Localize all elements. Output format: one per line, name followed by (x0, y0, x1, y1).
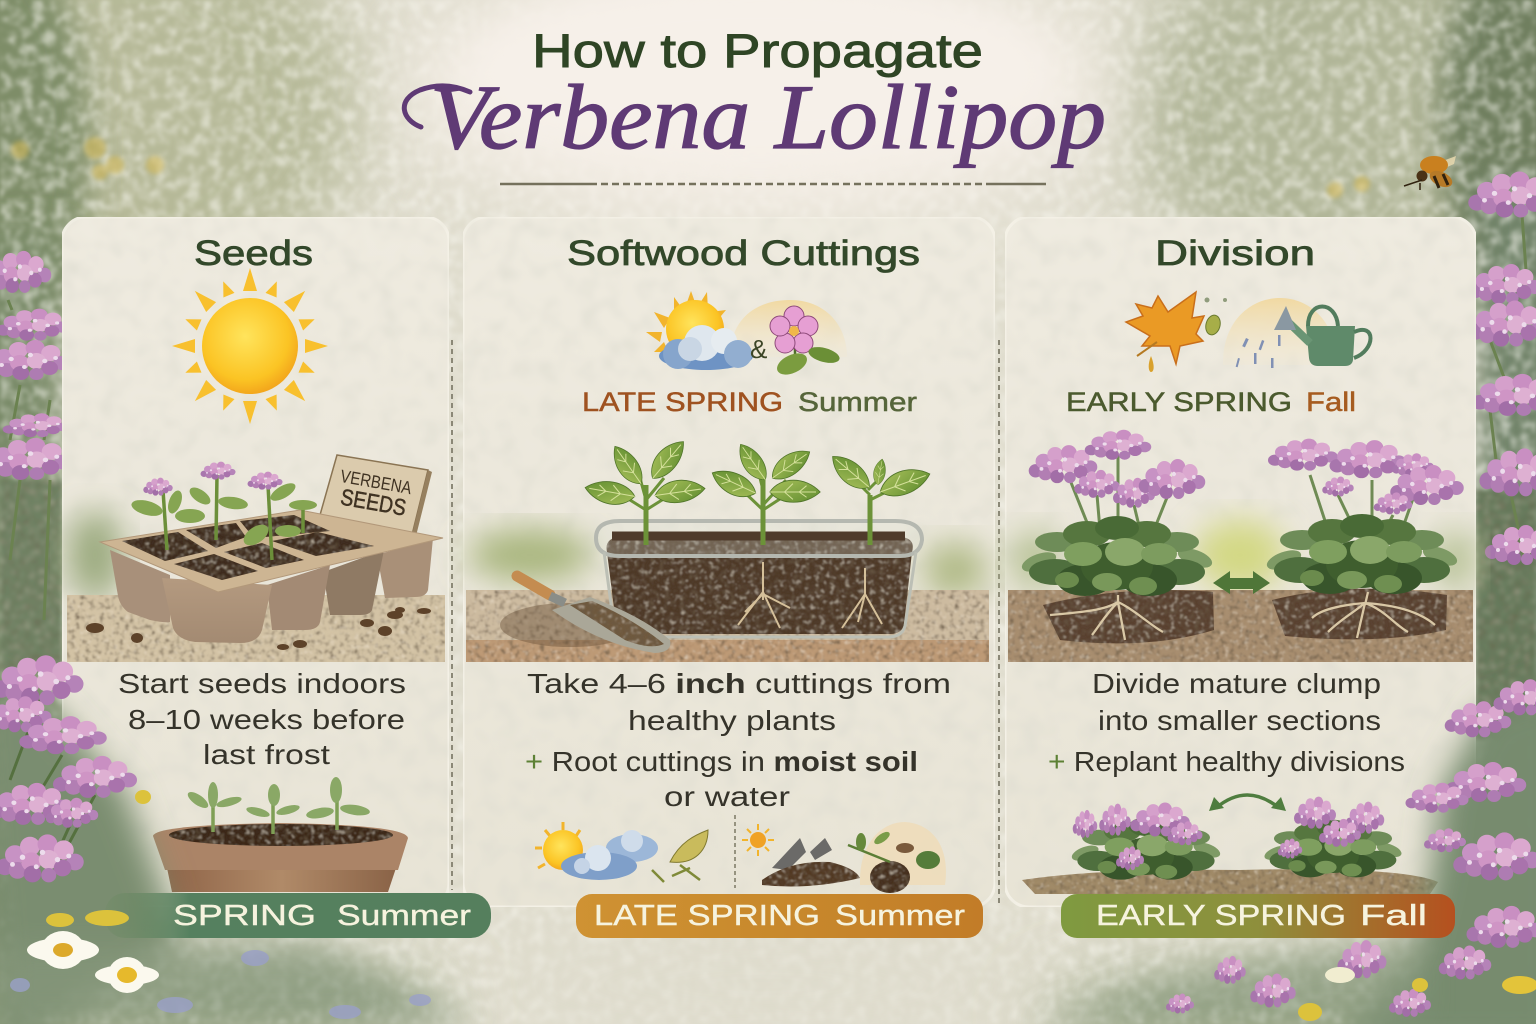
title line two: Verbena Lollipop (430, 66, 1106, 168)
cuttings (583, 434, 933, 545)
season pill: late spring summer (576, 894, 983, 938)
icon: sun (172, 268, 328, 424)
text: seeds instructions (118, 668, 406, 770)
title line one: How to Propagate (532, 24, 983, 77)
season label: late spring summer: Summer (798, 387, 917, 417)
text: seeds instructions: last frost (203, 739, 330, 770)
plant label: VERBENA (339, 466, 413, 498)
icon: maple leaf and watering can (1126, 292, 1370, 372)
season pill: early spring fall: EARLY SPRING (1096, 900, 1346, 932)
illustration: divided verbena plants (1008, 430, 1477, 662)
seedlings (130, 462, 317, 560)
icon: sun, cloud and flower (646, 291, 847, 379)
roots (738, 562, 882, 628)
title (404, 24, 1106, 168)
tray (100, 510, 443, 643)
illustration: glass container with rooted cuttings (466, 434, 989, 662)
season pill: early spring fall: Fall (1360, 900, 1427, 932)
soil and glass (607, 537, 913, 634)
panel: seeds (62, 217, 449, 907)
text: cuttings instructions: + Root cuttings in moist soil (525, 746, 918, 777)
season pill: spring summer: Summer (337, 900, 471, 932)
season label: early spring fall: Fall (1306, 387, 1356, 417)
text: division instructions: into smaller sections (1098, 705, 1381, 736)
flowers: bottom meadow (10, 790, 1536, 1021)
icon: cuttings care scenes (535, 815, 946, 893)
plant label: SEEDS (339, 484, 408, 521)
season label: late spring summer: LATE SPRING (582, 387, 783, 417)
weather (535, 822, 708, 882)
illustration: terracotta pot with seedlings (153, 777, 408, 892)
flowers: left border lower (0, 655, 480, 1024)
text: seeds instructions: 8–10 weeks before (128, 704, 405, 735)
panel: division (1005, 217, 1476, 907)
panel: softwood cuttings (463, 217, 995, 907)
text: cuttings instructions: healthy plants (628, 705, 836, 736)
text: cuttings instructions: or water (664, 781, 790, 812)
trowel (517, 576, 670, 653)
illustration: seed tray with seedlings (67, 455, 445, 662)
illustration: replanted divisions (1022, 797, 1438, 894)
arrow: curved (1209, 795, 1286, 811)
season pill: early spring fall (1061, 894, 1455, 938)
season pill: spring summer: SPRING (173, 900, 316, 932)
icon: bee (1404, 156, 1456, 190)
watering can (1274, 306, 1370, 366)
cloud (659, 325, 753, 370)
text: division instructions: Divide mature clump (1092, 668, 1381, 699)
daisies (27, 931, 159, 993)
heading: softwood cuttings: Softwood Cuttings (567, 234, 920, 273)
flowers: left border upper (0, 251, 72, 670)
heading: seeds: Seeds (194, 234, 313, 273)
heading: division: Division (1155, 234, 1315, 273)
left plant (1019, 430, 1215, 643)
plant label (320, 455, 432, 544)
maple leaf (1126, 292, 1204, 364)
flower (770, 306, 841, 379)
season label: early spring fall: EARLY SPRING (1066, 387, 1292, 417)
text: division instructions (1048, 668, 1405, 777)
text: seeds instructions: Start seeds indoors (118, 668, 406, 699)
arrow: between divisions (1213, 571, 1270, 594)
flowers: right border upper (1468, 172, 1536, 740)
flowers: right border lower (1030, 679, 1536, 1024)
small yellow flowers (46, 790, 1428, 1021)
right plant (1264, 439, 1464, 639)
tools and soil (742, 822, 946, 893)
season pill: spring summer (105, 893, 491, 938)
text: cuttings instructions: Take 4–6 inch cuttings from (527, 668, 951, 699)
season label: late spring summer (582, 387, 917, 417)
season pill: late spring summer: LATE SPRING (594, 900, 820, 932)
icon: sun, cloud and flower: & (750, 334, 767, 364)
season label: early spring fall (1066, 387, 1356, 417)
text: division instructions: + Replant healthy divisions (1048, 746, 1405, 777)
text: cuttings instructions (525, 668, 951, 812)
season pill: late spring summer: Summer (835, 900, 965, 932)
